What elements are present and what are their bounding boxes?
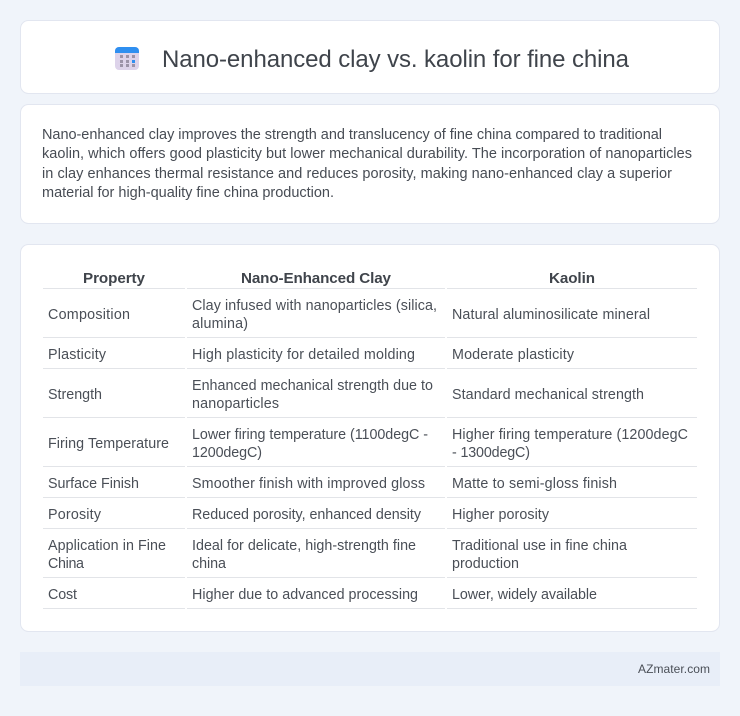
row: composition <box>48 298 650 332</box>
row: composition: Composition <box>48 307 130 323</box>
row: surface finish: Surface Finish <box>48 476 139 492</box>
row: porosity: Porosity <box>48 507 102 523</box>
table header: Property <box>83 270 146 287</box>
footer credit: AZmater.com <box>638 662 710 676</box>
row: plasticity: Plasticity <box>48 347 107 363</box>
header card <box>20 20 720 94</box>
row: firing temperature: Firing Temperature <box>48 436 169 452</box>
row: porosity: Reduced porosity, enhanced density <box>192 507 422 523</box>
row: application in fine china: china <box>192 556 226 572</box>
row: firing temperature: 1200degC) <box>192 445 262 461</box>
row: application in fine china: Traditional use in fine china <box>452 538 627 554</box>
row: porosity <box>48 507 550 523</box>
row: cost: Cost <box>48 587 77 603</box>
row: application in fine china: China <box>48 556 84 572</box>
comparison table card <box>20 244 720 632</box>
row: strength: Standard mechanical strength <box>452 387 644 403</box>
title: Nano-enhanced clay vs. kaolin for fine china <box>162 46 630 73</box>
row: application in fine china: Application in Fine <box>48 538 166 554</box>
intro paragraph: kaolin, which offers good plasticity but lower mechanical durability. The incorporation of nanoparticles <box>42 146 692 162</box>
row: composition: Natural aluminosilicate mineral <box>452 307 650 323</box>
row: firing temperature: Higher firing temperature (1200degC <box>452 427 688 443</box>
intro card <box>20 104 720 224</box>
row: firing temperature: - 1300degC) <box>452 445 530 461</box>
row: firing temperature: Lower firing temperature (1100degC - <box>192 427 428 443</box>
intro paragraph: Nano-enhanced clay improves the strength and translucency of fine china compared to traditional <box>42 127 662 143</box>
row: firing temperature <box>48 427 688 461</box>
row: porosity: Higher porosity <box>452 507 550 523</box>
row: plasticity: High plasticity for detailed molding <box>192 347 415 363</box>
intro paragraph <box>42 127 692 201</box>
row: surface finish <box>48 476 617 492</box>
row: plasticity: Moderate plasticity <box>452 347 575 363</box>
table header: Nano-Enhanced Clay <box>241 270 392 287</box>
row: composition: Clay infused with nanoparticles (silica, <box>192 298 437 314</box>
row: composition: alumina) <box>192 316 248 332</box>
row: plasticity <box>48 347 575 363</box>
row: surface finish: Smoother finish with improved gloss <box>192 476 425 492</box>
table header: Kaolin <box>549 270 595 287</box>
row: cost: Higher due to advanced processing <box>192 587 418 603</box>
intro paragraph: material for high-quality fine china production. <box>42 185 334 201</box>
row: strength: Enhanced mechanical strength due to <box>192 378 433 394</box>
row: strength: nanoparticles <box>192 396 279 412</box>
footer bar <box>20 652 720 686</box>
row: cost <box>48 587 597 603</box>
row: application in fine china: production <box>452 556 519 572</box>
table header <box>83 270 595 287</box>
row: application in fine china: Ideal for delicate, high-strength fine <box>192 538 416 554</box>
row: cost: Lower, widely available <box>452 587 597 603</box>
row: strength <box>48 378 644 412</box>
row: strength: Strength <box>48 387 102 403</box>
row: application in fine china <box>48 538 627 572</box>
intro paragraph: in clay enhances thermal resistance and reduces porosity, making nano-enhanced clay a superior <box>42 166 672 182</box>
icon: calendar <box>115 47 139 70</box>
row: surface finish: Matte to semi-gloss finish <box>452 476 617 492</box>
